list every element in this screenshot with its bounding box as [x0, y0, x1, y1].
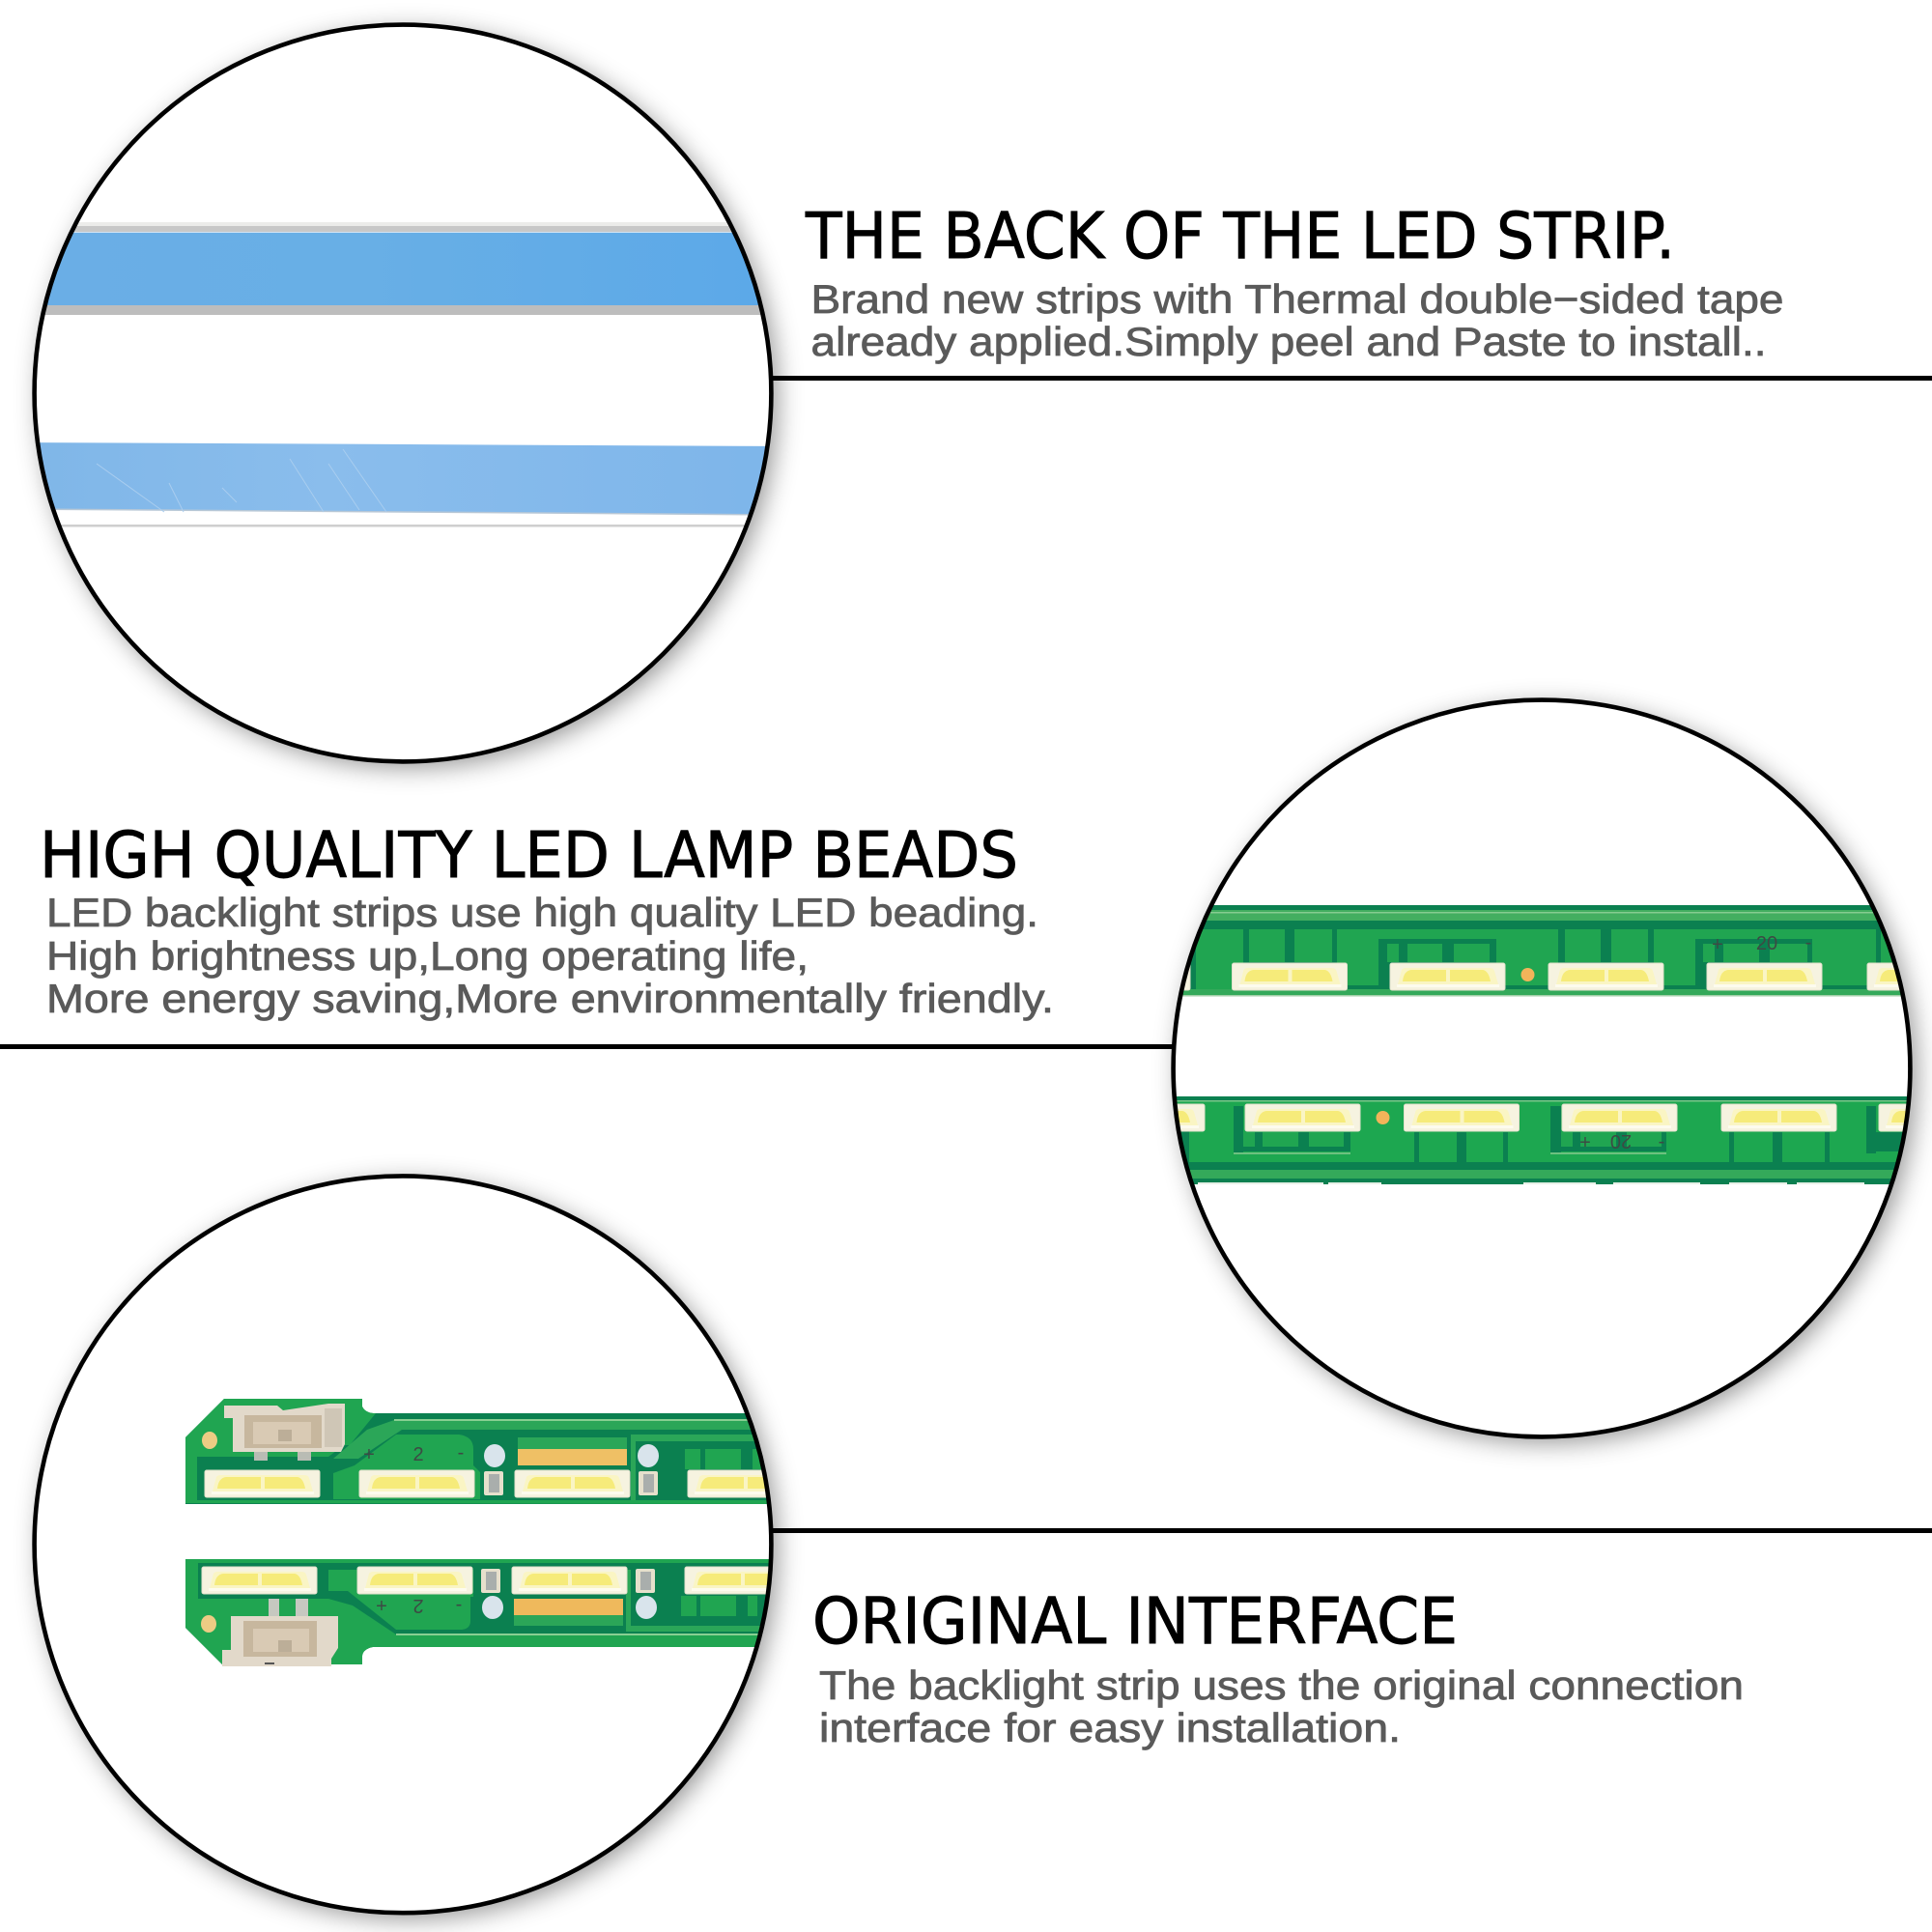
text block: lamp beads description: LED backlight strips use high quality LED beading.	[46, 890, 1038, 935]
text block: back of the strip description	[811, 276, 1783, 364]
heading: the back of the LED strip: THE BACK OF THE LED STRIP.	[805, 199, 1675, 273]
text block: back of the strip description: Brand new strips with Thermal double−sided tape	[811, 276, 1783, 322]
panel: circle showing LED beads on green boards	[1075, 700, 1932, 1436]
text block: back of the strip description: already applied.Simply peel and Paste to install..	[811, 319, 1766, 364]
panel: circle showing the back of the LED strip	[19, 25, 792, 761]
upper board with connector: +	[363, 1444, 375, 1465]
upper LED strip	[1182, 905, 1901, 997]
text block: lamp beads description: High brightness up,Long operating life,	[46, 933, 809, 979]
lower LED strip: -	[1659, 1131, 1664, 1152]
upper board with connector	[185, 1399, 803, 1504]
connector: top	[224, 1404, 345, 1461]
text block: original interface description	[819, 1662, 1744, 1750]
text block: lamp beads description	[46, 890, 1054, 1021]
lower LED strip: 20	[1610, 1130, 1632, 1151]
upper board with connector: 2	[412, 1444, 424, 1465]
divider line: original interface	[770, 1528, 1932, 1533]
lower LED strip: +	[1579, 1132, 1591, 1153]
text block: original interface description: The backlight strip uses the original connection	[819, 1662, 1744, 1708]
upper LED strip: +	[1712, 934, 1723, 955]
lower board with connector: -	[456, 1594, 462, 1615]
panel: circle showing the original connector interface	[35, 1176, 803, 1913]
connector: bottom	[222, 1599, 338, 1666]
text block: original interface description: interface for easy installation.	[819, 1705, 1401, 1750]
lower LED strip	[1177, 1096, 1907, 1184]
divider line: back of strip	[770, 376, 1932, 381]
upper LED strip: -	[1805, 932, 1811, 953]
lower board with connector	[185, 1559, 800, 1666]
divider line: lamp beads	[0, 1044, 1174, 1049]
text block: lamp beads description: More energy saving,More environmentally friendly.	[46, 976, 1054, 1021]
lower board with connector: 2	[412, 1595, 424, 1616]
heading: original interface: ORIGINAL INTERFACE	[812, 1584, 1458, 1659]
lower board with connector: +	[376, 1596, 387, 1617]
upper LED strip: 20	[1756, 933, 1777, 954]
heading: high quality LED lamp beads: HIGH QUALITY LED LAMP BEADS	[40, 818, 1018, 893]
upper board with connector: -	[458, 1442, 464, 1463]
